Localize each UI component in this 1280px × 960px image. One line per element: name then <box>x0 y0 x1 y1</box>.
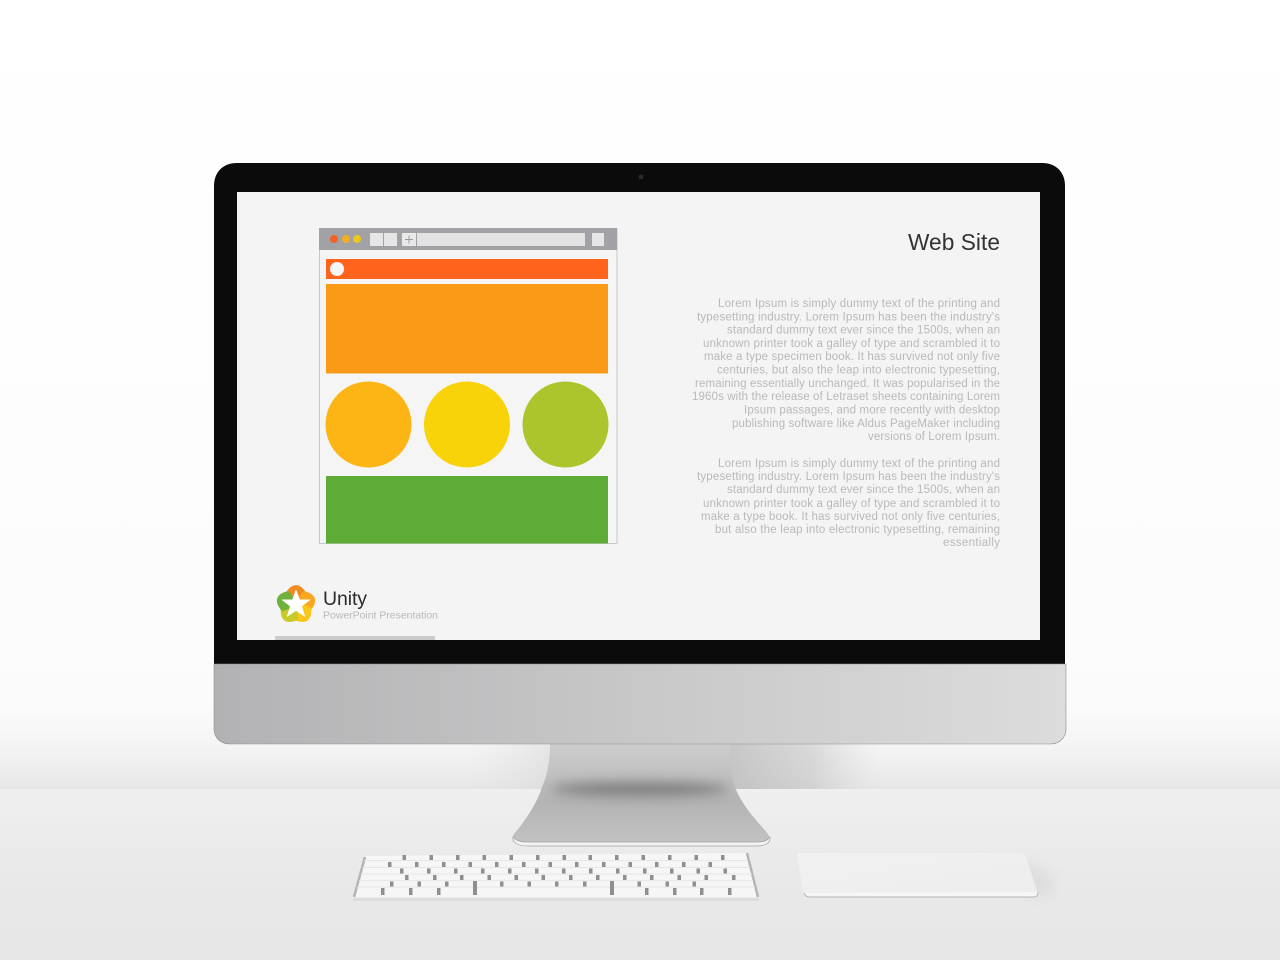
trackpad rim <box>804 892 1038 897</box>
key rows <box>357 860 755 887</box>
paragraph 2: standard dummy text ever since the 1500s, when an <box>727 484 1000 496</box>
paragraph 1: typesetting industry. Lorem Ipsum has been the industry's <box>697 312 1000 324</box>
paragraph 2: typesetting industry. Lorem Ipsum has been the industry's <box>697 471 1000 483</box>
footer tab <box>275 636 435 640</box>
paragraph 2: essentially <box>943 537 1000 549</box>
heading: Web Site <box>908 229 1000 255</box>
paragraph 1: Ipsum passages, and more recently with desktop <box>744 404 1000 416</box>
keyboard bottom rim <box>353 898 759 901</box>
paragraph 2 <box>697 458 1000 549</box>
keyboard body <box>353 853 759 901</box>
paragraph 2: Lorem Ipsum is simply dummy text of the printing and <box>718 458 1000 470</box>
paragraph 1: standard dummy text ever since the 1500s, when an <box>727 324 1000 336</box>
paragraph 1: versions of Lorem Ipsum. <box>868 431 1000 443</box>
keyboard <box>353 853 759 901</box>
amber banner <box>326 284 608 374</box>
paragraph 1: centuries, but also the leap into electronic typesetting, <box>717 364 1000 376</box>
monitor <box>214 163 1066 744</box>
monitor stand <box>513 744 770 846</box>
trackpad surface <box>797 853 1037 894</box>
yellow circle <box>424 382 510 468</box>
browser toolbar <box>319 228 617 250</box>
paragraph 1: 1960s with the release of Letraset sheets containing Lorem <box>692 391 1000 403</box>
paragraph 2: unknown printer took a galley of type and scrambled it to <box>703 498 1000 510</box>
key gaps <box>381 855 736 895</box>
browser wireframe illustration <box>319 228 617 544</box>
browser window <box>320 228 617 544</box>
monitor chin <box>214 664 1066 744</box>
brand name: Unity <box>323 588 367 610</box>
paragraph 2: make a type book. It has survived not only five centuries, <box>701 511 1000 523</box>
paragraph 1: publishing software like Aldus PageMaker including <box>732 418 1000 430</box>
brand subtitle: PowerPoint Presentation <box>323 610 438 622</box>
paragraph 1: Lorem Ipsum is simply dummy text of the printing and <box>718 298 1000 310</box>
trackpad shadow <box>1024 858 1056 896</box>
monitor cast shadow right <box>729 744 880 789</box>
orange header bar <box>326 259 608 279</box>
paragraph 1: unknown printer took a galley of type and scrambled it to <box>703 338 1000 350</box>
green footer block <box>326 476 608 544</box>
paragraph 1: remaining essentially unchanged. It was popularised in the <box>695 378 1000 390</box>
monitor bezel <box>214 163 1065 664</box>
paragraph 1: make a type specimen book. It has survived not only five <box>704 351 1000 363</box>
webcam <box>638 174 644 180</box>
stand body <box>513 744 769 842</box>
paragraph 2: but also the leap into electronic typesetting, remaining <box>715 524 1000 536</box>
desk surface <box>0 789 1280 960</box>
keyboard side edges <box>354 853 758 897</box>
monitor cast shadow left <box>470 744 550 789</box>
trackpad <box>797 853 1056 897</box>
stand base rim <box>513 837 770 846</box>
amber circle <box>326 382 412 468</box>
icon: Unity star logo <box>279 587 313 620</box>
lime circle <box>522 382 608 468</box>
stand shadow band <box>550 782 730 796</box>
screen <box>237 192 1040 640</box>
paragraph 1 <box>692 298 1000 443</box>
